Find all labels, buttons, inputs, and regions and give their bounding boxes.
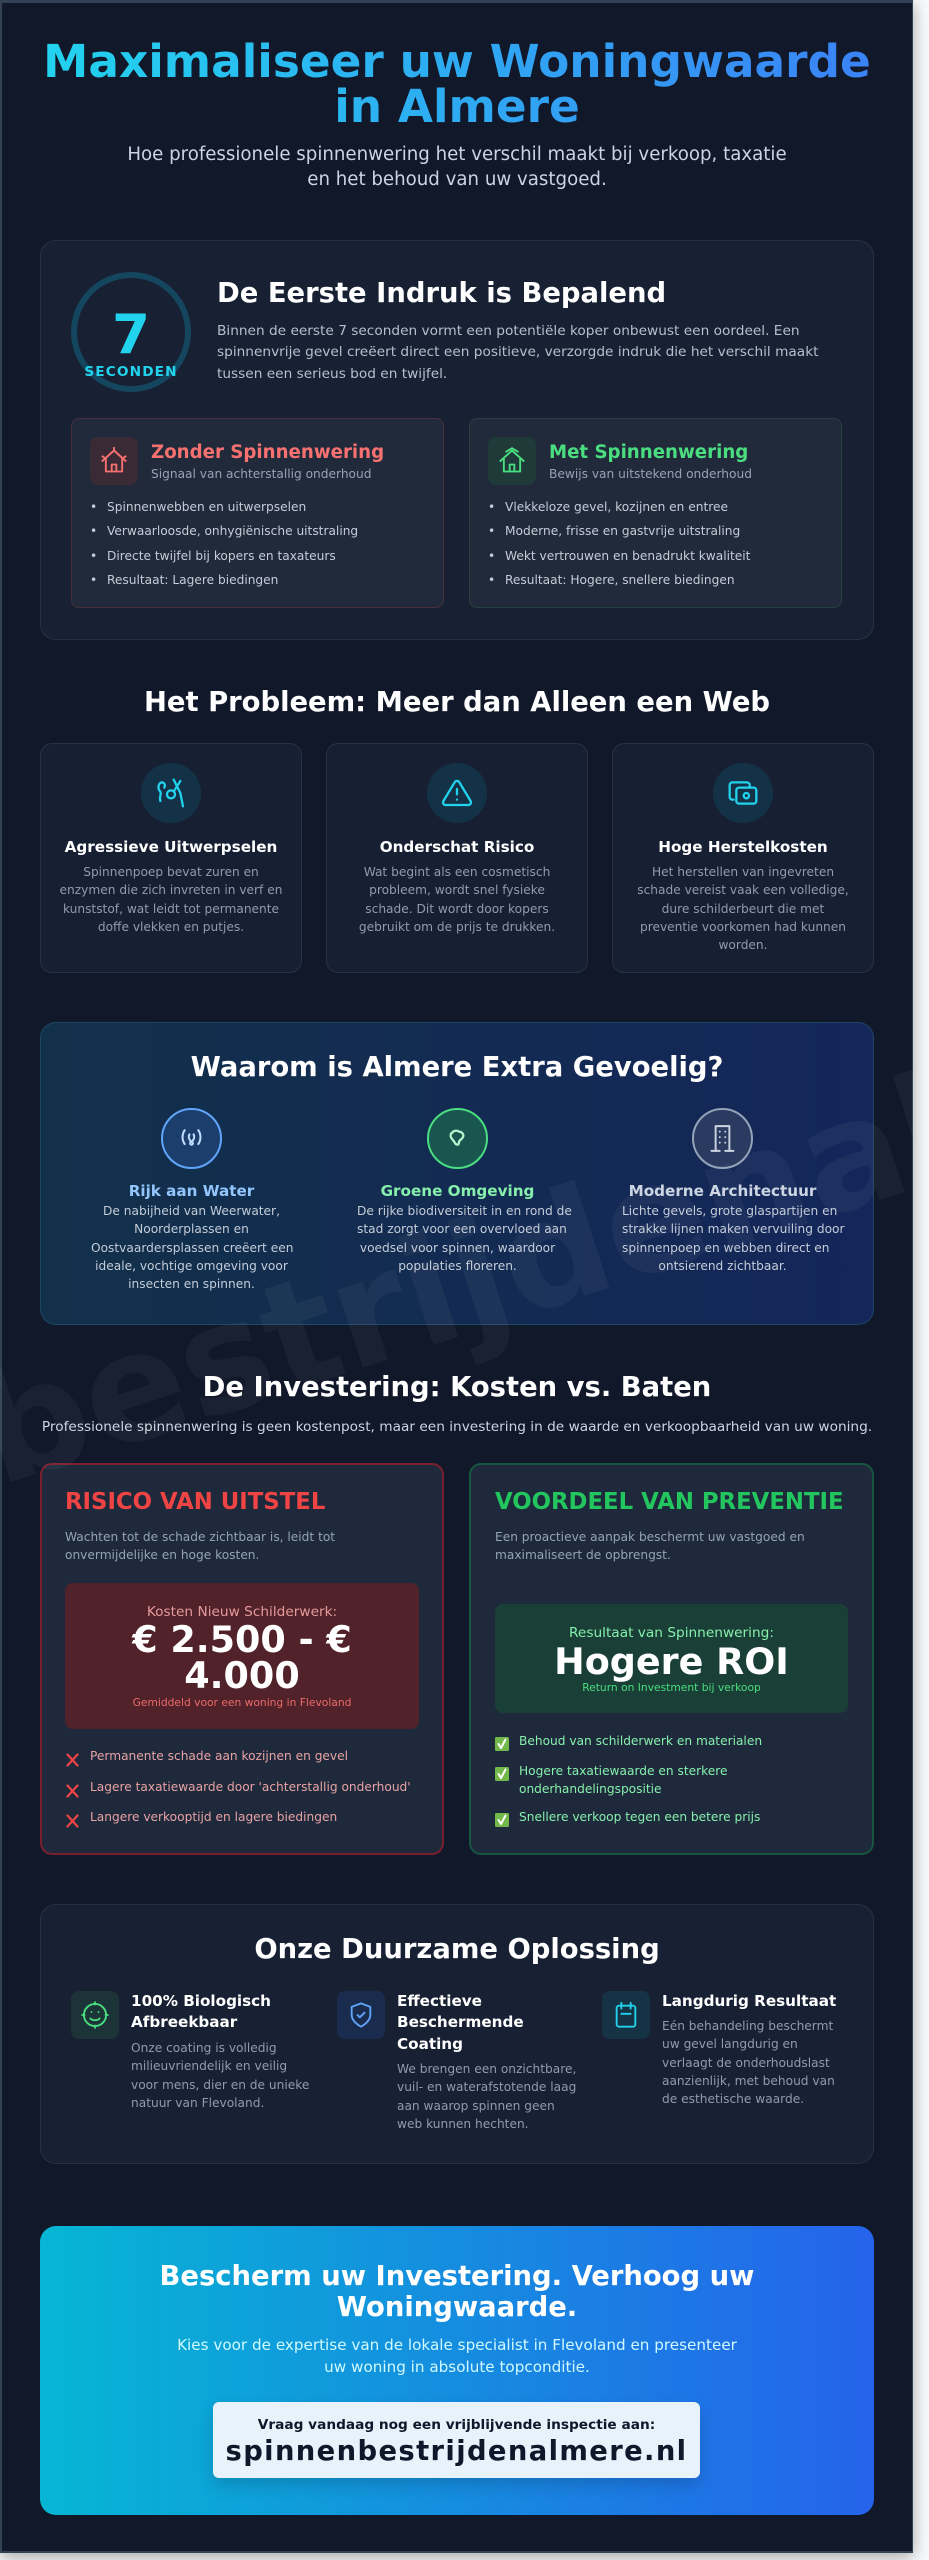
card text: dure schilderbeurt die met [662, 902, 824, 916]
list: without [90, 500, 358, 587]
list: with [488, 500, 750, 587]
text: Noorderplassen en [134, 1222, 249, 1236]
text: ontsierend zichtbaar. [658, 1259, 787, 1273]
text: spinnenpoep en webben direct en [622, 1241, 830, 1255]
text [131, 2041, 309, 2110]
panel: call to action [40, 2226, 874, 2515]
feature: long lasting [602, 1991, 836, 2106]
text: Onze coating is volledig [131, 2041, 277, 2055]
list: with: Moderne, frisse en gastvrije uitstraling [505, 524, 740, 538]
card text: gebruikt om de prijs te drukken. [359, 920, 555, 934]
icon: calendar [602, 1991, 650, 2039]
risk text [65, 1530, 335, 1562]
title: Effectieve [397, 1992, 482, 2010]
text: de esthetische waarde. [662, 2092, 804, 2106]
text: We brengen een onzichtbare, [397, 2062, 576, 2076]
icon: money [713, 763, 773, 823]
icon: water [161, 1108, 222, 1169]
heading: problem: Het Probleem: Meer dan Alleen een Web [144, 687, 770, 718]
card text: enzymen die zich invreten in verf en [60, 883, 282, 897]
benefit text [495, 1530, 805, 1562]
heading: call to action [160, 2261, 754, 2323]
card text [359, 865, 555, 934]
text [357, 1204, 572, 1273]
list: with: • [488, 524, 495, 538]
title: Langdurig Resultaat [662, 1992, 836, 2010]
call to action text [177, 2336, 737, 2376]
panel: sustainable solution [40, 1904, 874, 2164]
roi note: Return on Investment bij verkoop [582, 1681, 761, 1694]
card text: preventie voorkomen had kunnen [640, 920, 846, 934]
heading: call to action: Bescherm uw Investering. Verhoog uw [160, 2261, 754, 2292]
cost value: € 2.500 - € [132, 1618, 352, 1661]
risk list: Permanente schade aan kozijnen en gevel [90, 1749, 348, 1763]
text: uw gevel langdurig en [662, 2037, 798, 2051]
card text: doffe vlekken en putjes. [98, 920, 244, 934]
text: natuur van Flevoland. [131, 2096, 264, 2110]
list: without: Spinnenwebben en uitwerpselen [107, 500, 306, 514]
heading: investment: De Investering: Kosten vs. Baten [203, 1372, 711, 1403]
first impression text: Binnen de eerste 7 seconden vormt een potentiële koper onbewust een oordeel. Een [217, 323, 800, 339]
card text: schade. Dit wordt door kopers [365, 902, 549, 916]
call to action text: uw woning in absolute topconditie. [324, 2358, 590, 2376]
panel: without spider protection [71, 418, 444, 608]
column: water [91, 1108, 293, 1291]
title: Rijk aan Water [129, 1182, 254, 1200]
list: without: • [90, 573, 97, 587]
card text [637, 865, 849, 952]
title: Afbreekbaar [131, 2013, 237, 2031]
card: underestimated risk [326, 743, 588, 973]
risk text: Wachten tot de schade zichtbaar is, leidt tot [65, 1530, 335, 1544]
icon: leaf face [71, 1991, 119, 2039]
heading: with: Met Spinnenwering [549, 442, 748, 463]
list: without: • [90, 524, 97, 538]
cost label: Kosten Nieuw Schilderwerk: [147, 1604, 337, 1620]
title [397, 1992, 524, 2053]
icon: cross [66, 1814, 79, 1828]
text [662, 2019, 835, 2106]
icon: check [495, 1767, 509, 1781]
roi box [495, 1604, 848, 1713]
first impression text: spinnenvrije gevel creëert direct een positieve, verzorgde indruk die het verschil maakt [217, 344, 818, 360]
call to action text: Kies voor de expertise van de lokale specialist in Flevoland en presenteer [177, 2336, 737, 2354]
first impression text [217, 323, 818, 382]
text: De nabijheid van Weerwater, [103, 1204, 280, 1218]
heading: risk: RISICO VAN UITSTEL [65, 1489, 325, 1515]
risk list: Lagere taxatiewaarde door 'achterstallig onderhoud' [90, 1780, 411, 1794]
text: milieuvriendelijk en veilig [131, 2059, 287, 2073]
first impression text: tussen een serieus bod en twijfel. [217, 366, 447, 382]
panel: why Almere [40, 1022, 874, 1325]
icon: check [495, 1813, 509, 1827]
list: with: • [488, 549, 495, 563]
text: Lichte gevels, grote glaspartijen en [622, 1204, 837, 1218]
cost note: Gemiddeld voor een woning in Flevoland [133, 1696, 351, 1709]
website url: spinnenbestrijdenalmere.nl [226, 2436, 687, 2467]
risk list: Langere verkooptijd en lagere biedingen [90, 1810, 337, 1824]
risk list [66, 1749, 411, 1828]
text: voor mens, dier en de unieke [131, 2078, 309, 2092]
card title: Hoge Herstelkosten [658, 838, 828, 856]
benefit text: maximaliseert de opbrengst. [495, 1548, 671, 1562]
panel: first impression [40, 240, 874, 640]
title: Moderne Architectuur [629, 1182, 816, 1200]
card text: schade vereist vaak een volledige, [637, 883, 849, 897]
subtitle [127, 144, 787, 190]
text [622, 1204, 845, 1273]
subheading: with: Bewijs van uitstekend onderhoud [549, 467, 752, 481]
text: ideale, vochtige omgeving voor [95, 1259, 288, 1273]
benefit list: Snellere verkoop tegen een betere prijs [519, 1810, 760, 1824]
list: with: • [488, 573, 495, 587]
cost value: 4.000 [184, 1654, 300, 1697]
investment subtitle: Professionele spinnenwering is geen kostenpost, maar een investering in de waarde en verkoopbaarheid van uw woning. [42, 1419, 872, 1435]
column: green [357, 1108, 572, 1273]
text: De rijke biodiversiteit in en rond de [357, 1204, 572, 1218]
roi label: Resultaat van Spinnenwering: [569, 1625, 774, 1641]
text [91, 1204, 293, 1291]
card text: worden. [718, 938, 768, 952]
text: populaties floreren. [398, 1259, 517, 1273]
cost value [132, 1618, 352, 1697]
heading: call to action: Woningwaarde. [337, 2292, 577, 2323]
benefit list: Hogere taxatiewaarde en sterkere [519, 1764, 727, 1778]
icon: cross [66, 1753, 79, 1767]
card: high repair cost [612, 743, 874, 973]
list: without: Verwaarloosde, onhygiënische uitstraling [107, 524, 358, 538]
benefit list [495, 1734, 762, 1827]
panel: with spider protection [469, 418, 842, 608]
feature: protective coating [337, 1991, 576, 2131]
benefit text: Een proactieve aanpak beschermt uw vastgoed en [495, 1530, 805, 1544]
column: architecture [622, 1108, 845, 1273]
feature: biodegradable [71, 1991, 309, 2110]
text: insecten en spinnen. [128, 1277, 255, 1291]
title: 100% Biologisch [131, 1992, 271, 2010]
list: with: • [488, 500, 495, 514]
subtitle: Hoe professionele spinnenwering het verschil maakt bij verkoop, taxatie [127, 144, 787, 165]
heading: benefit: VOORDEEL VAN PREVENTIE [495, 1489, 844, 1515]
card title: Agressieve Uitwerpselen [65, 838, 277, 856]
text: Oostvaardersplassen creëert een [91, 1241, 293, 1255]
card text: probleem, wordt snel fysieke [369, 883, 545, 897]
list: without: • [90, 500, 97, 514]
title: Maximaliseer uw Woningwaarde [43, 35, 871, 88]
benefit list: Behoud van schilderwerk en materialen [519, 1734, 762, 1748]
icon: warning [427, 763, 487, 823]
icon: clean house [488, 437, 536, 485]
icon: cross [66, 1784, 79, 1798]
seven seconds badge: 7 [112, 302, 150, 366]
card title: Onderschat Risico [380, 838, 534, 856]
heading: solution: Onze Duurzame Oplossing [254, 1934, 660, 1965]
panel: risk of delay [40, 1463, 444, 1855]
card text: Spinnenpoep bevat zuren en [83, 865, 259, 879]
icon: building [692, 1108, 753, 1169]
seven seconds badge [71, 272, 191, 392]
list: without: Resultaat: Lagere biedingen [107, 573, 278, 587]
risk text: onvermijdelijke en hoge kosten. [65, 1548, 259, 1562]
title [131, 1992, 271, 2031]
website box [213, 2402, 700, 2478]
card: aggressive droppings [40, 743, 302, 973]
roi value: Hogere ROI [554, 1640, 789, 1683]
text: voedsel voor spinnen, waardoor [360, 1241, 555, 1255]
icon: leaf [427, 1108, 488, 1169]
text: verlaagt de onderhoudslast [662, 2056, 830, 2070]
title: Beschermende [397, 2013, 524, 2031]
text: vuil- en waterafstotende laag [397, 2080, 576, 2094]
cost box [65, 1583, 419, 1729]
list: without: Directe twijfel bij kopers en taxateurs [107, 549, 336, 563]
list: with: Vlekkeloze gevel, kozijnen en entree [505, 500, 728, 514]
icon: spider droppings [141, 763, 201, 823]
heading: without: Zonder Spinnenwering [151, 442, 384, 463]
subtitle: en het behoud van uw vastgoed. [307, 169, 607, 190]
text: web kunnen hechten. [397, 2117, 529, 2131]
list: with: Resultaat: Hogere, snellere biedingen [505, 573, 735, 587]
text: stad zorgt voor een overvloed aan [357, 1222, 567, 1236]
icon: damaged house [90, 437, 138, 485]
list: with: Wekt vertrouwen en benadrukt kwaliteit [505, 549, 750, 563]
title: in Almere [334, 80, 580, 133]
panel: benefit of prevention [469, 1463, 874, 1855]
subheading: without: Signaal van achterstallig onderhoud [151, 467, 371, 481]
website label: Vraag vandaag nog een vrijblijvende inspectie aan: [258, 2417, 655, 2433]
seven seconds badge: SECONDEN [84, 364, 178, 380]
card text: kunststof, wat leidt tot permanente [63, 902, 279, 916]
text [397, 2062, 576, 2131]
text: strakke lijnen maken vervuiling door [622, 1222, 845, 1236]
text: Eén behandeling beschermt [662, 2019, 833, 2033]
text: aan waarop spinnen geen [397, 2099, 555, 2113]
icon: shield [337, 1991, 385, 2039]
heading: why Almere: Waarom is Almere Extra Gevoelig? [191, 1052, 723, 1083]
title: Coating [397, 2035, 463, 2053]
title [40, 39, 874, 129]
list: without: • [90, 549, 97, 563]
heading: first impression: De Eerste Indruk is Bepalend [217, 278, 666, 309]
card text: Het herstellen van ingevreten [652, 865, 834, 879]
icon: check [495, 1737, 509, 1751]
text: aanzienlijk, met behoud van [662, 2074, 835, 2088]
card text: Wat begint als een cosmetisch [364, 865, 550, 879]
card text [60, 865, 282, 934]
benefit list: onderhandelingspositie [519, 1782, 662, 1796]
title: Groene Omgeving [381, 1182, 534, 1200]
